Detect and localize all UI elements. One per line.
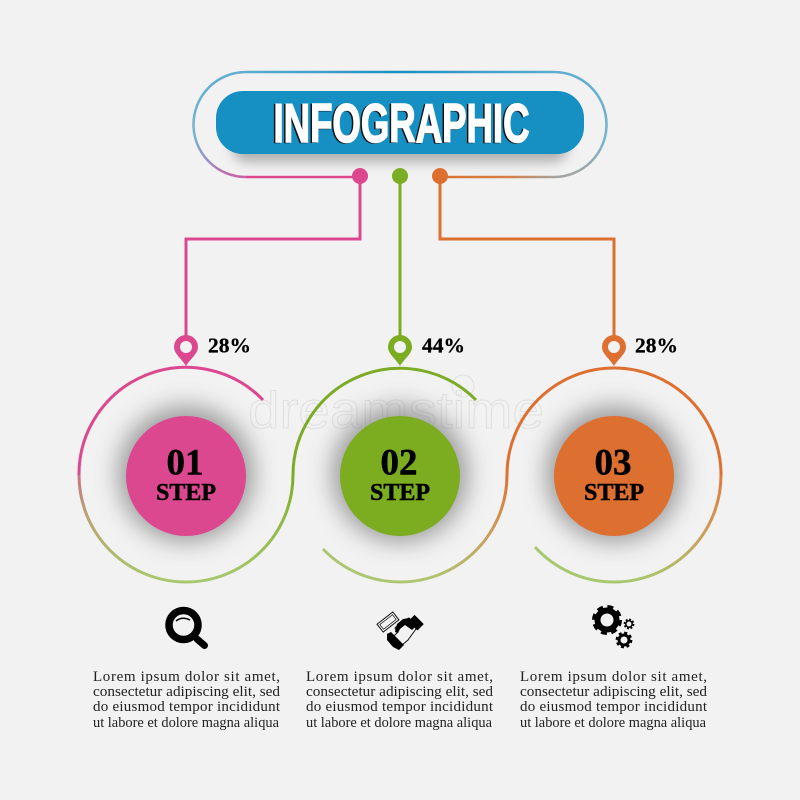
- connector: green: [392, 168, 408, 340]
- text block: step 3: [520, 669, 708, 731]
- watermark: dreamstime: [248, 382, 544, 440]
- title banner: [216, 91, 584, 162]
- text block: step 1: do eiusmod tempor incididunt: [93, 699, 281, 715]
- step 1 circle: 01: [166, 442, 204, 484]
- text block: step 3: do eiusmod tempor incididunt: [520, 699, 708, 715]
- text block: step 3: consectetur adipiscing elit, sed: [520, 684, 708, 700]
- step 3 circle: STEP: [584, 480, 644, 506]
- text block: step 1: ut labore et dolore magna aliqua: [93, 715, 279, 731]
- connector: orange: [432, 168, 614, 340]
- text block: step 2: do eiusmod tempor incididunt: [306, 699, 494, 715]
- icon: gears: [594, 607, 634, 647]
- icon: handshake: [377, 612, 424, 650]
- text block: step 2: [306, 669, 494, 731]
- title text: INFOGRAPHIC: [274, 92, 530, 154]
- step 2 circle: [332, 406, 468, 542]
- title text: INFOGRAPHIC: [272, 92, 528, 154]
- icon: magnifying glass: [169, 610, 204, 646]
- text block: step 2: ut labore et dolore magna aliqua: [306, 715, 492, 731]
- percent: 44%: 44%: [422, 334, 465, 358]
- step 1 circle: STEP: [156, 480, 216, 506]
- small gear: [624, 619, 634, 629]
- percent: 28%: 28%: [208, 334, 251, 358]
- pin: green: [388, 335, 412, 366]
- text block: step 2: consectetur adipiscing elit, sed: [306, 684, 494, 700]
- ring: step 2 to 3 line: [323, 368, 721, 582]
- text block: step 1: [93, 669, 281, 731]
- step 1 circle: [118, 406, 254, 542]
- text block: step 1: consectetur adipiscing elit, sed: [93, 684, 281, 700]
- step 3 circle: 03: [594, 442, 632, 484]
- step 2 circle: STEP: [370, 480, 430, 506]
- text block: step 2: Lorem ipsum dolor sit amet,: [306, 669, 493, 685]
- pin: orange: [602, 335, 626, 366]
- title text: [272, 92, 530, 154]
- ring: step 1 to 2 line: [79, 367, 476, 582]
- connector: pink: [186, 168, 368, 340]
- medium gear: [617, 633, 631, 647]
- header pill outline: [194, 72, 606, 177]
- step 3 circle: [546, 406, 682, 542]
- percent: 28%: 28%: [635, 334, 678, 358]
- step 2 circle: 02: [380, 442, 418, 484]
- pin: pink: [174, 335, 198, 366]
- large gear: [594, 607, 620, 633]
- text block: step 3: Lorem ipsum dolor sit amet,: [520, 669, 707, 685]
- text block: step 1: Lorem ipsum dolor sit amet,: [93, 669, 280, 685]
- text block: step 3: ut labore et dolore magna aliqua: [520, 715, 706, 731]
